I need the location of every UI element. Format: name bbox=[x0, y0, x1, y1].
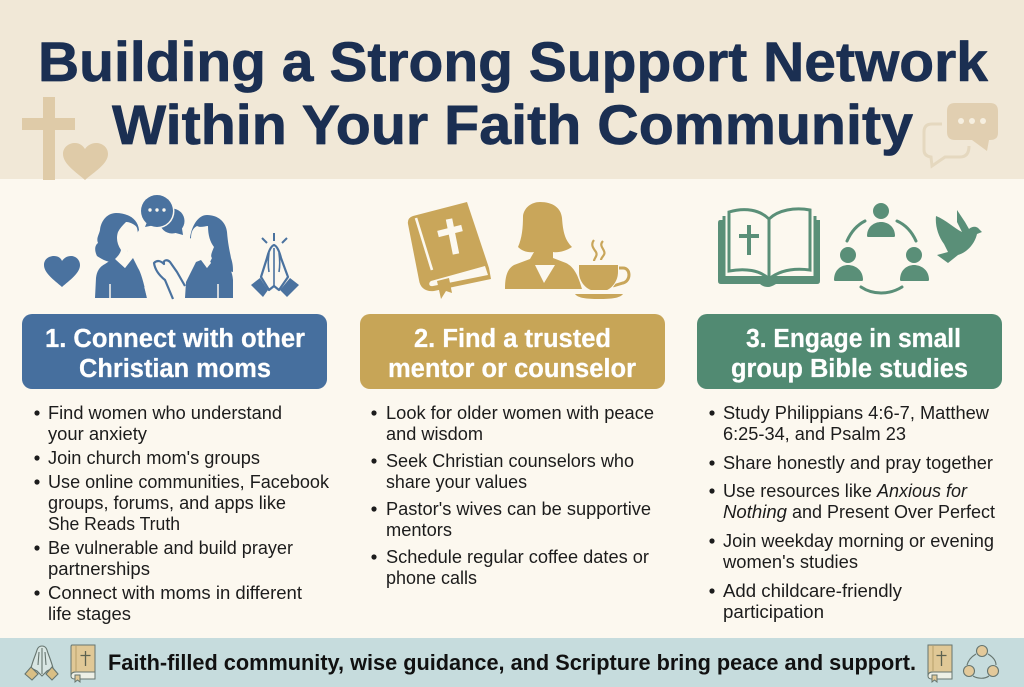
panel: Engage in small group Bible studies bbox=[697, 314, 1002, 389]
bullet list: column 2: Schedule regular coffee dates or bbox=[386, 547, 649, 567]
bullet list: column 1: partnerships bbox=[48, 559, 150, 579]
footer text: Faith-filled community, wise guidance, and Scripture bring peace and support. bbox=[108, 650, 916, 675]
panel heading 3 bbox=[731, 325, 968, 383]
bullet list: column 1 bbox=[34, 403, 330, 624]
panel heading 3: 3. Engage in small bbox=[746, 325, 961, 353]
bullet list: column 1: She Reads Truth bbox=[48, 514, 180, 534]
bullet list: column 2: Seek Christian counselors who bbox=[386, 451, 634, 471]
icon: cross bbox=[22, 97, 75, 180]
title bbox=[38, 31, 988, 156]
bullet list: column 3: and Present Over Perfect bbox=[792, 502, 995, 522]
icon: dove bbox=[936, 210, 982, 263]
panel heading 3: group Bible studies bbox=[731, 355, 968, 383]
icon: footer bible left bbox=[71, 645, 95, 682]
bullet list: column 1: groups, forums, and apps like bbox=[48, 493, 286, 513]
bullet list: column 2 bbox=[371, 403, 654, 588]
bullet list: column 3: women's studies bbox=[722, 552, 858, 572]
icon: coffee cup bbox=[575, 240, 629, 299]
panel heading 1 bbox=[45, 325, 305, 383]
bullet list: column 3: participation bbox=[723, 602, 824, 622]
footer band bbox=[0, 638, 1024, 687]
icon: footer praying hands bbox=[25, 646, 58, 680]
icon group: connecting women bbox=[44, 194, 299, 299]
icon: chat bubbles bbox=[140, 194, 184, 235]
title: Within Your Faith Community bbox=[112, 94, 913, 156]
icon: open bible bbox=[718, 209, 820, 287]
icon: woman right bbox=[154, 215, 233, 299]
icon: woman left bbox=[95, 213, 148, 299]
bullet list: column 3: Nothing bbox=[723, 502, 787, 522]
bullet list: column 3: Share honestly and pray together bbox=[723, 453, 993, 473]
bullet list: column 1: your anxiety bbox=[48, 424, 147, 444]
icon group: bible study bbox=[718, 203, 982, 293]
bullet list: column 1: Connect with moms in different bbox=[48, 583, 302, 603]
icon: mentor silhouette bbox=[505, 202, 582, 289]
panel: Find a trusted mentor or counselor bbox=[360, 314, 665, 389]
bullet list: column 2: and wisdom bbox=[386, 424, 483, 444]
panel heading 2: 2. Find a trusted bbox=[414, 325, 611, 353]
icon group: mentor bbox=[408, 202, 629, 299]
bullet list: column 3: 6:25-34, and Psalm 23 bbox=[723, 424, 906, 444]
bullet list: column 2: phone calls bbox=[386, 568, 477, 588]
bullet list: column 1: life stages bbox=[48, 604, 131, 624]
bullet list: column 1: Use online communities, Facebook bbox=[48, 472, 330, 492]
icon: praying hands bbox=[251, 233, 299, 297]
bullet list: column 2: mentors bbox=[386, 520, 452, 540]
bullet list: column 2: Look for older women with peace bbox=[386, 403, 654, 423]
panel heading 1: 1. Connect with other bbox=[45, 325, 305, 353]
panel heading 1: Christian moms bbox=[79, 355, 271, 383]
bullet list: column 2: share your values bbox=[386, 472, 527, 492]
bullet list: column 1: Find women who understand bbox=[48, 403, 282, 423]
bullet list: column 2: Pastor's wives can be supportive bbox=[386, 499, 651, 519]
icon: bible bbox=[408, 202, 491, 299]
icon: people circle bbox=[834, 203, 929, 293]
panel heading 2 bbox=[388, 325, 636, 383]
header band bbox=[0, 0, 1024, 179]
bullet list: column 3: Add childcare-friendly bbox=[723, 581, 902, 601]
bullet list: column 1: Be vulnerable and build prayer bbox=[48, 538, 293, 558]
icon: header heart bbox=[63, 143, 108, 180]
panel: Connect with other Christian moms bbox=[22, 314, 327, 389]
bullet list: column 1: Join church mom's groups bbox=[48, 448, 260, 468]
bullet list: column 3: Anxious for bbox=[876, 481, 968, 501]
icon: header speech bubbles bbox=[924, 103, 998, 166]
icon: footer people circle bbox=[964, 646, 998, 678]
icon: footer bible right bbox=[928, 645, 952, 682]
panel heading 2: mentor or counselor bbox=[388, 355, 636, 383]
bullet list: column 3: Use resources like bbox=[723, 481, 872, 501]
title: Building a Strong Support Network bbox=[38, 31, 988, 93]
bullet list: column 3 bbox=[709, 403, 995, 622]
icon: blue heart bbox=[44, 256, 80, 287]
bullet list: column 3: Study Philippians 4:6-7, Matthew bbox=[723, 403, 990, 423]
bullet list: column 3: Join weekday morning or evening bbox=[723, 531, 994, 551]
